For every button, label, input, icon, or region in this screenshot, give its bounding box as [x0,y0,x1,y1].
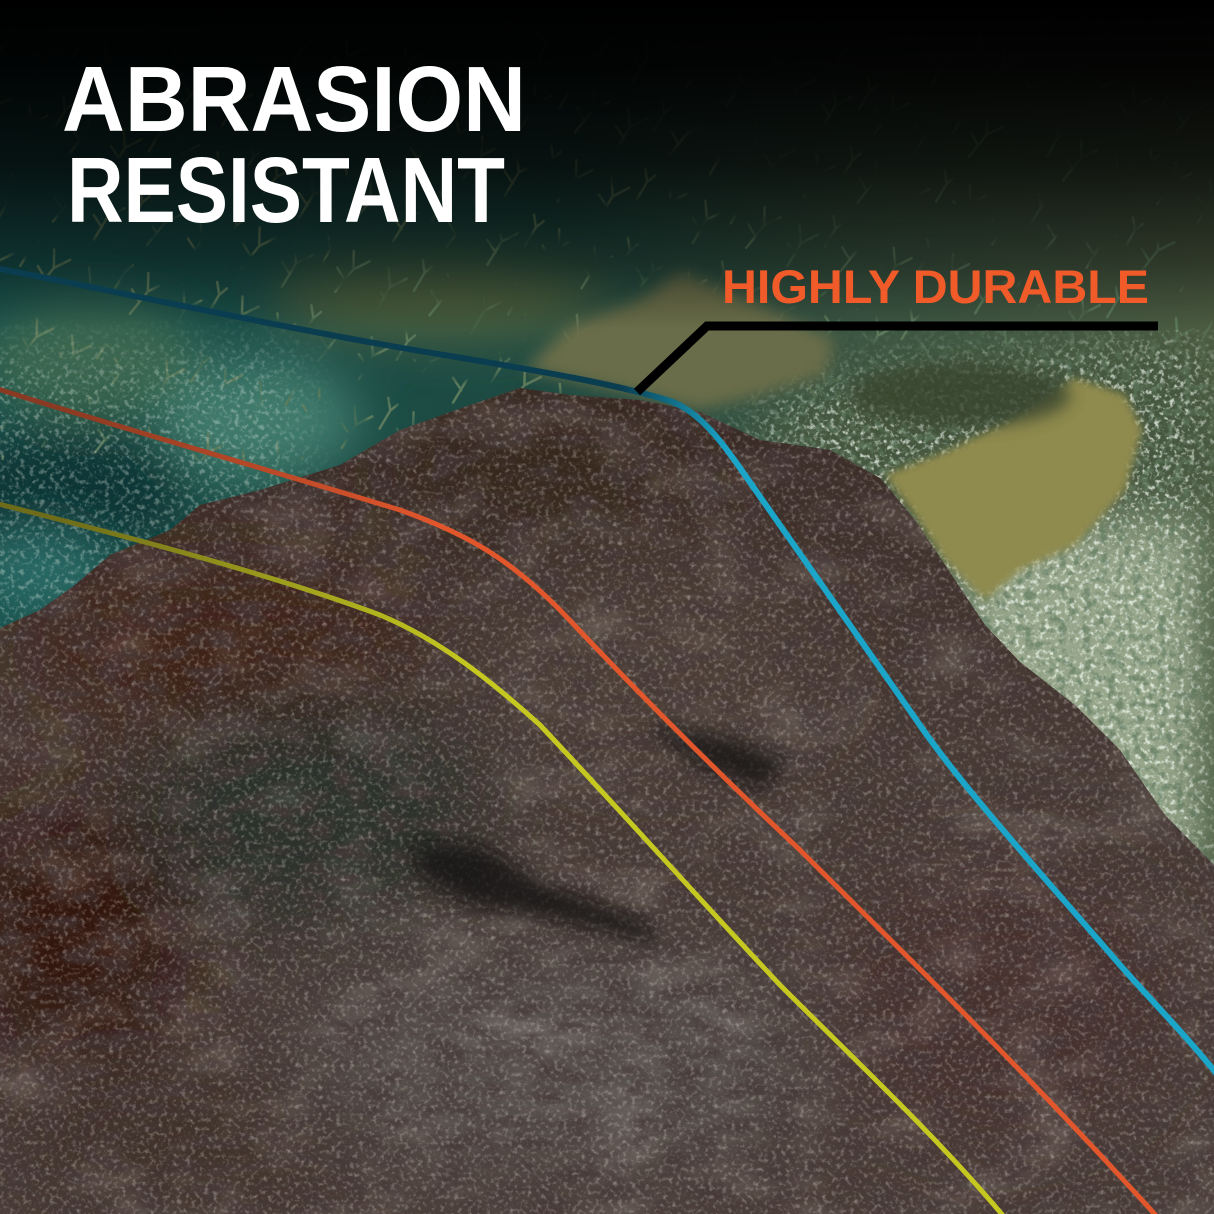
callout: highly durable: HIGHLY DURABLE [722,260,1149,313]
callout leader line [637,326,1158,392]
rock [0,380,1214,1214]
right coral field [716,330,1214,865]
title [62,47,526,242]
left coral speckle [0,324,326,628]
top dark vignette [0,0,1214,330]
rock tonal patches [0,410,1170,1210]
title: RESISTANT [67,138,505,242]
rock shadows [410,725,790,945]
branching coral texture [0,103,1212,460]
line: orange [0,388,1160,1214]
title: ABRASION [62,47,526,151]
brain coral [885,378,1142,600]
upper pale coral [525,272,835,410]
background: underwater reef [0,74,1214,865]
line: blue [0,268,1214,1078]
left teal coral mass [0,260,610,610]
line: yellow [0,503,1005,1214]
